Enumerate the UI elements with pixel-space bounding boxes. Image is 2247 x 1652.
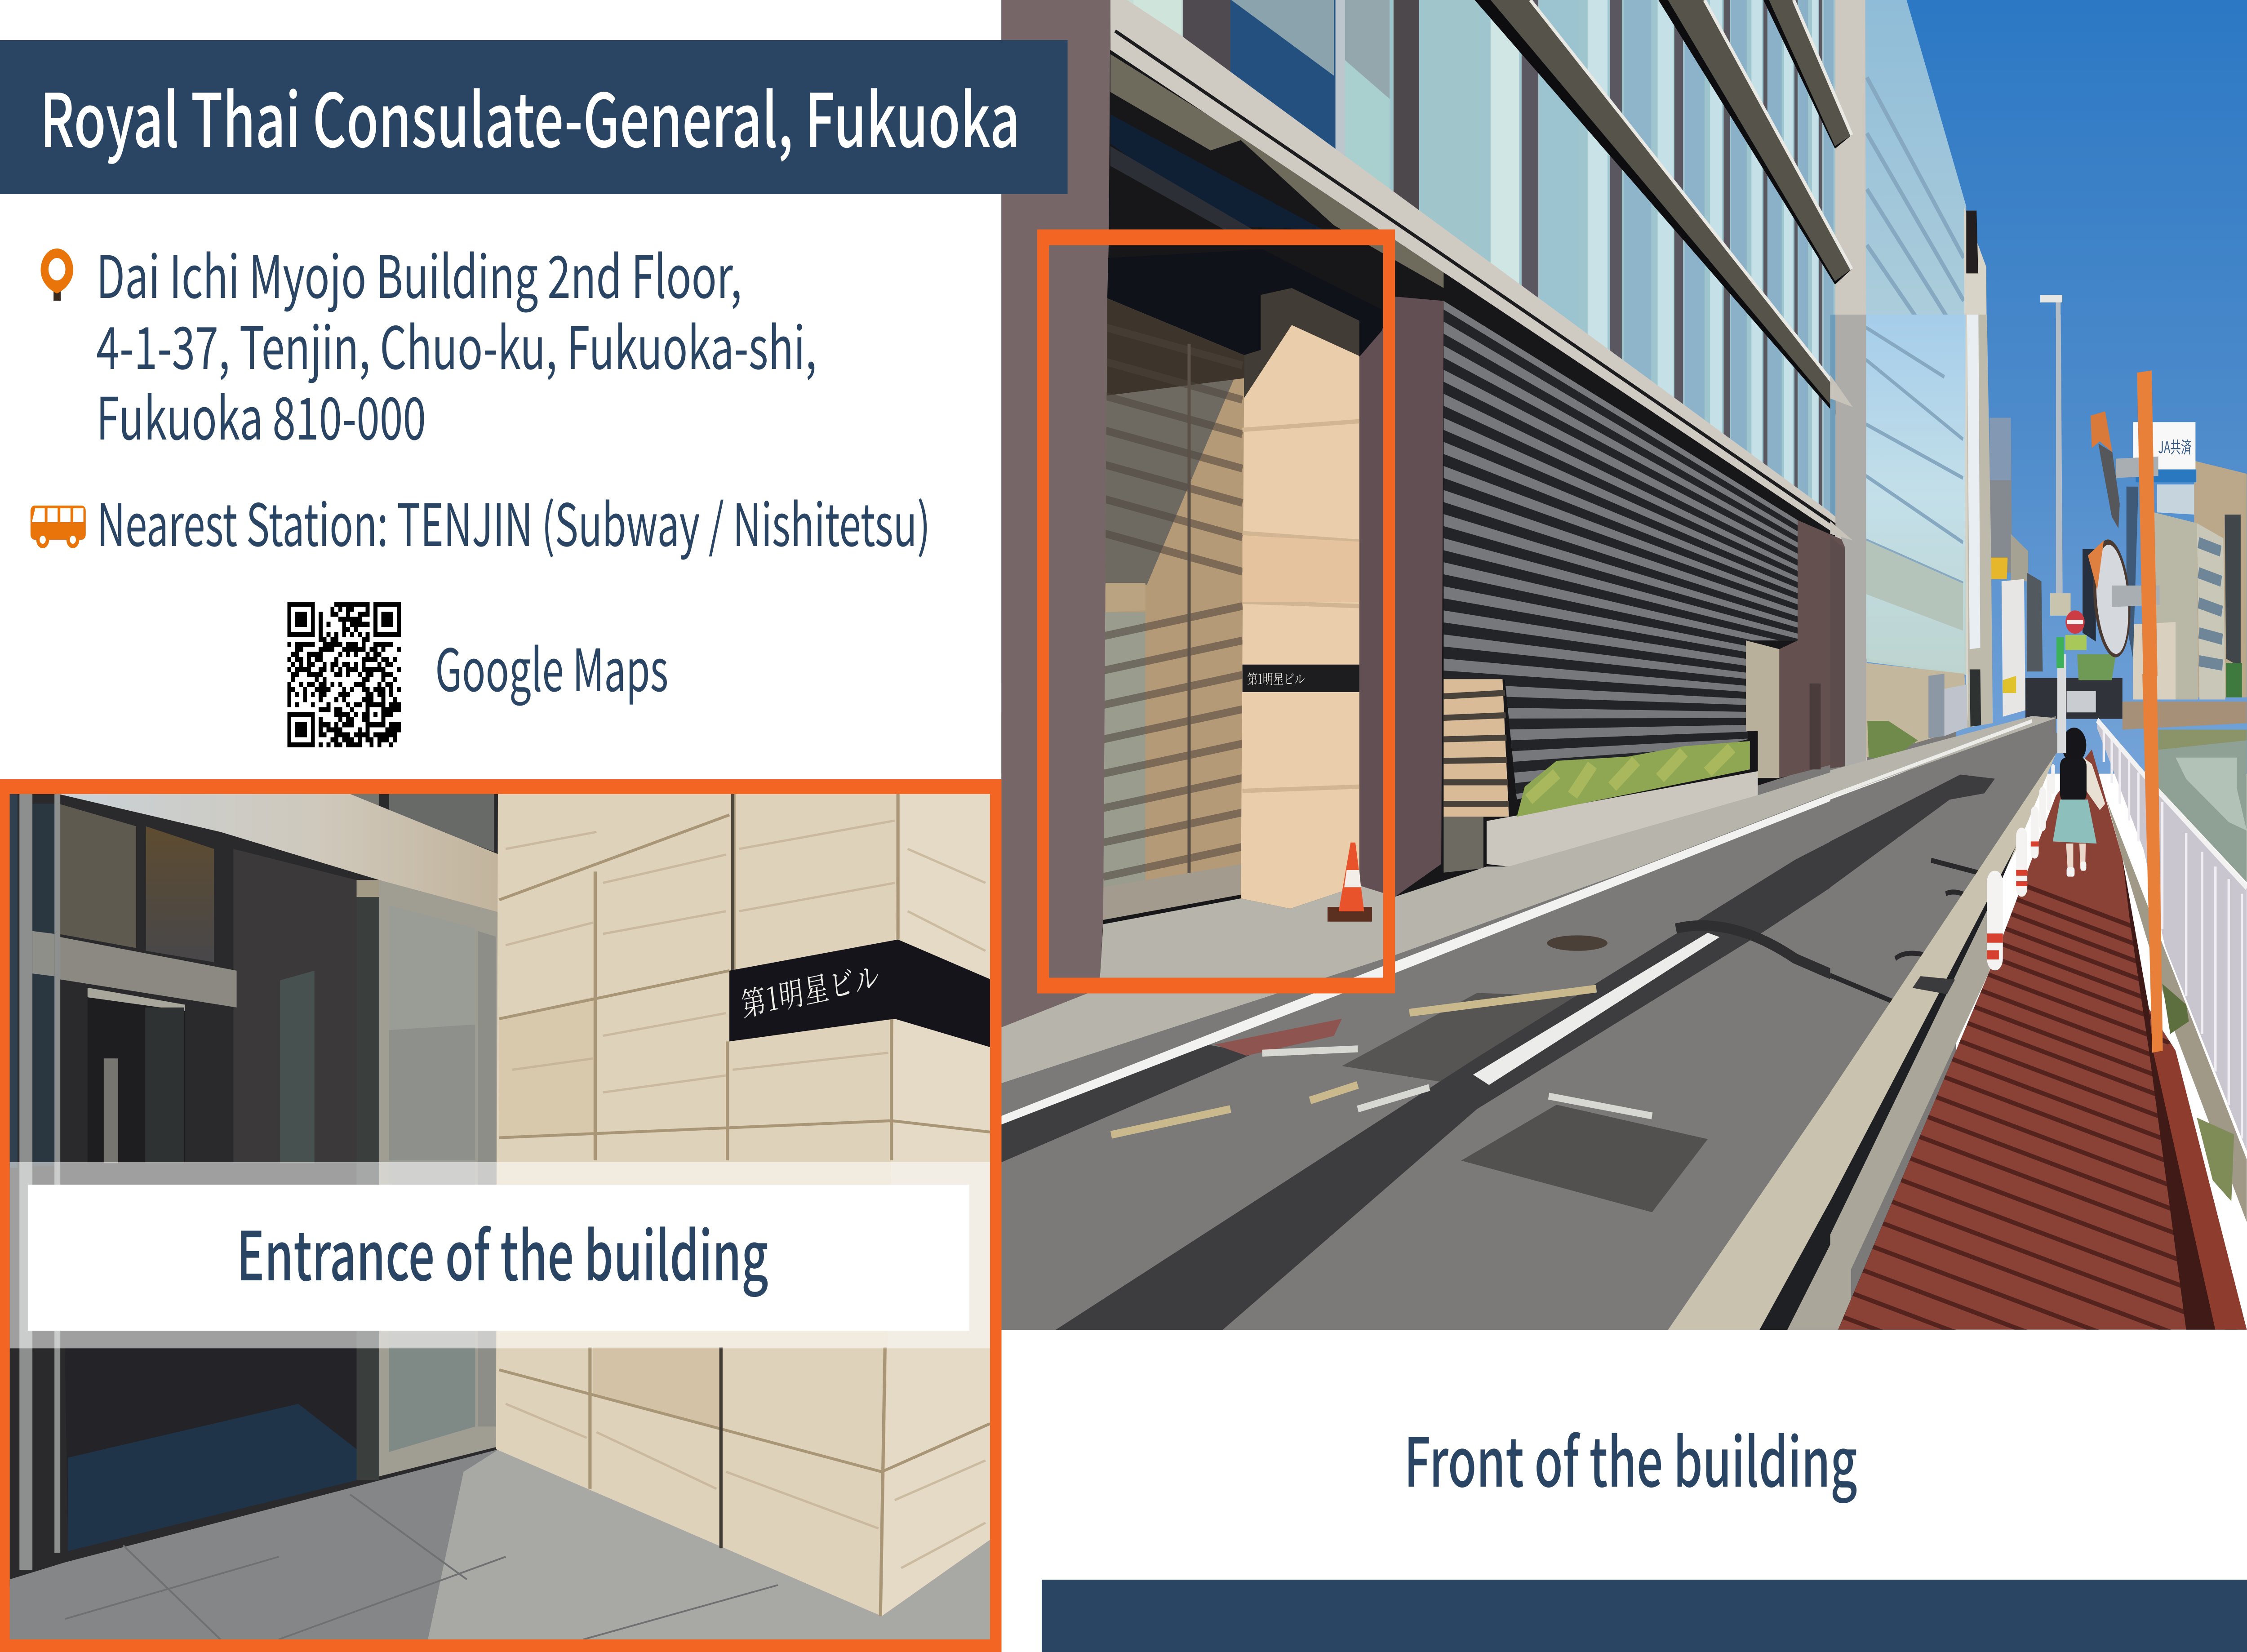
mirror two xyxy=(2088,536,2135,661)
QR code xyxy=(288,602,401,747)
pole brackets xyxy=(2112,457,2160,607)
far street scenery xyxy=(1830,315,2247,882)
address text xyxy=(96,231,817,457)
canopy soffit xyxy=(58,794,499,914)
floor ledges xyxy=(1474,0,1852,414)
sign text: entrance photo: 第1明星ビル xyxy=(739,952,881,1026)
left glass building xyxy=(1830,315,1968,768)
person walking xyxy=(2053,728,2105,877)
road surface xyxy=(1830,716,2056,1092)
granite column and right wall xyxy=(1359,297,1847,897)
fascia band xyxy=(1110,0,1849,543)
photo: entrance of the building xyxy=(10,794,990,1639)
title banner xyxy=(0,40,1068,194)
road xyxy=(1001,720,2066,1330)
nearest station text: Nearest Station: TENJIN (Subway / Nishitetsu) xyxy=(97,479,930,563)
far buildings centre xyxy=(1967,315,2123,728)
stop sign xyxy=(2065,610,2085,634)
JA sign board xyxy=(2133,422,2196,482)
upper facade windows xyxy=(1111,0,1843,533)
far buildings right xyxy=(2127,461,2247,700)
left granite column xyxy=(1001,0,1110,1027)
road shadow xyxy=(1830,774,1995,888)
translucent caption band xyxy=(10,1162,990,1348)
black corner sign xyxy=(729,940,990,1047)
entrance shutter xyxy=(1099,292,1250,928)
caption text: Entrance of the building xyxy=(236,1203,768,1300)
panel: entrance photo frame xyxy=(0,779,1002,1652)
road underlay xyxy=(1001,714,1956,1330)
gutter and kerb xyxy=(1668,1066,1851,1330)
highlight frame around entrance xyxy=(1043,237,1389,986)
entrance soffit xyxy=(1108,249,1381,357)
building sign text: front photo: 第1明星ビル xyxy=(1247,668,1305,688)
bridge, bank and water xyxy=(2123,702,2247,882)
address text: Dai Ichi Myojo Building 2nd Floor, xyxy=(96,231,742,315)
Google Maps label: Google Maps xyxy=(435,624,668,708)
beige pillar xyxy=(1241,288,1359,909)
sign text: JA on distant building: JA共済 xyxy=(2158,435,2191,458)
building shadow base xyxy=(1001,0,1835,1027)
orange pole lower xyxy=(2142,674,2163,1053)
white fence xyxy=(2097,720,2247,1151)
near street foreground signs xyxy=(2050,315,2196,753)
title: Royal Thai Consulate-General, Fukuoka xyxy=(40,62,1020,168)
photo: front of the building xyxy=(1000,0,2247,1330)
footer bar xyxy=(1042,1580,2247,1652)
mirror one xyxy=(2091,411,2120,528)
address text: Fukuoka 810-000 xyxy=(96,372,426,457)
interior lobby panes xyxy=(10,794,356,1570)
icon: location pin xyxy=(40,249,73,301)
pole shadow on road xyxy=(1830,860,1987,1013)
gutter black line xyxy=(1830,846,2016,1235)
red walkway xyxy=(1830,745,2247,1470)
icon: bus xyxy=(31,506,86,548)
pavement kerb strip xyxy=(1830,716,2056,798)
lower left louvre section xyxy=(1443,679,1509,873)
planter xyxy=(1487,741,1758,866)
near street: road, kerb and walkway xyxy=(1830,674,2247,1470)
lamp pole xyxy=(2056,315,2066,753)
kerb band xyxy=(1830,884,2000,1314)
travertine wall xyxy=(496,794,990,1616)
gutter light band xyxy=(1830,754,2056,1201)
glass door xyxy=(356,880,499,1480)
green signs xyxy=(2056,635,2087,668)
caption box: entrance xyxy=(28,1185,969,1331)
address text: 4-1-37, Tenjin, Chuo-ku, Fukuoka-shi, xyxy=(96,302,817,386)
traffic cone xyxy=(1328,843,1372,922)
verge xyxy=(2106,799,2247,1222)
floor tiles xyxy=(10,1449,990,1639)
lamp head and top of lamp post xyxy=(2040,295,2062,318)
orange pole upper xyxy=(2137,370,2158,676)
road white line xyxy=(1830,721,2032,796)
drain grate xyxy=(1913,976,1955,994)
utility box xyxy=(2050,593,2070,616)
bollards xyxy=(1987,764,2055,970)
louvred wall xyxy=(1437,292,1803,808)
lobby floor and mat xyxy=(65,1347,356,1551)
pavement xyxy=(1001,720,2026,1083)
caption: front of the building: Front of the building xyxy=(1404,1409,1857,1506)
glass building top xyxy=(1835,0,1990,761)
